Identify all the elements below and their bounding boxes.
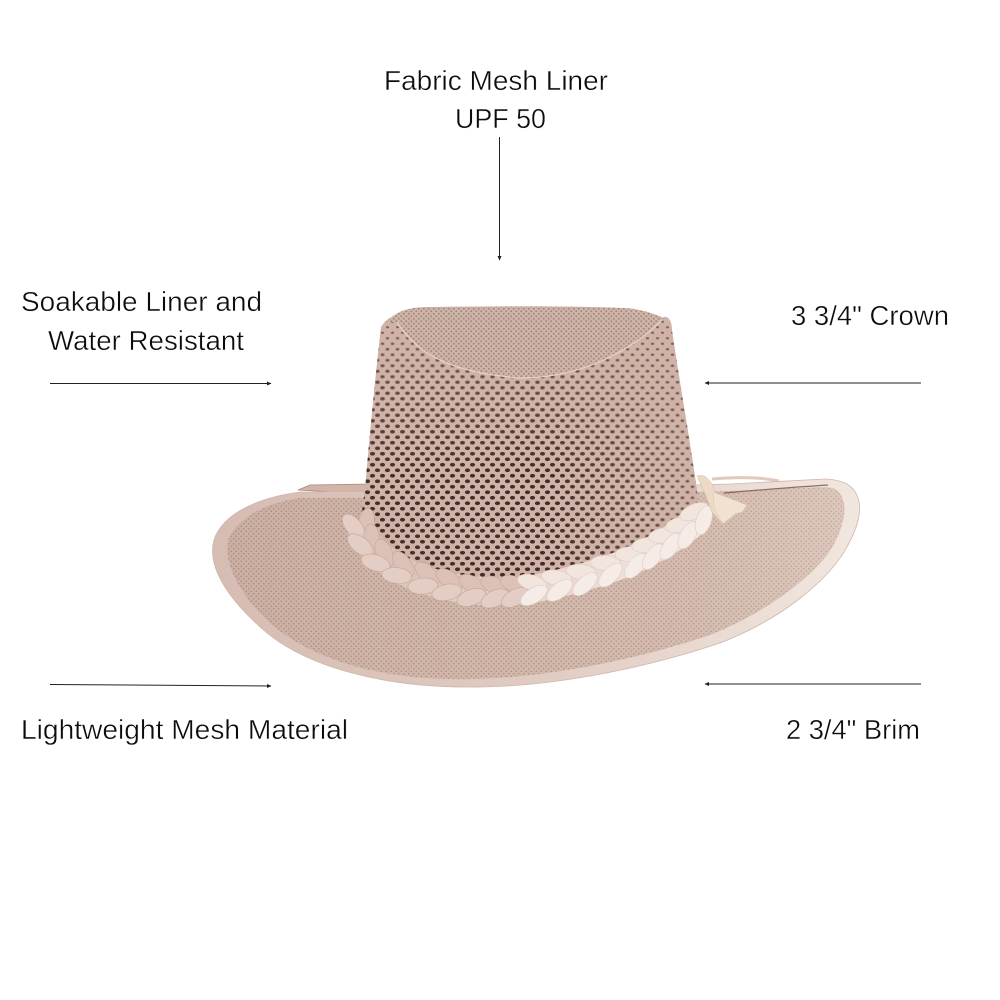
hat illustration — [213, 306, 860, 687]
brim mesh surface — [227, 487, 844, 679]
crown front mesh, base — [360, 316, 700, 591]
label: Soakable Liner and Water Resistant: Soakable Liner and — [21, 286, 262, 317]
tassel — [697, 475, 747, 524]
braided band — [336, 491, 725, 612]
brim back shadow — [724, 485, 828, 493]
brim — [213, 479, 860, 687]
label: 2 3/4" Brim: 2 3/4" Brim — [786, 714, 920, 745]
label: 3 3/4" Crown: 3 3/4" Crown — [791, 300, 949, 331]
arrow: to brim right — [705, 683, 921, 685]
arrow: to brim left — [50, 684, 271, 686]
dent shading — [397, 320, 662, 378]
brim edge binding — [213, 479, 860, 687]
crown top dent — [386, 306, 664, 378]
chin cord behind brim, left — [298, 484, 370, 494]
arrow: to crown right — [705, 382, 921, 384]
arrow: to crown top — [498, 137, 500, 260]
arrow: to crown left — [50, 382, 271, 384]
label: Soakable Liner and Water Resistant: Water Resistant — [48, 325, 244, 356]
brim light falloff — [227, 487, 844, 679]
label: Lightweight Mesh Material: Lightweight Mesh Material — [21, 714, 348, 745]
crown front mesh, dark holes — [362, 336, 698, 577]
crown — [360, 306, 700, 591]
label: Fabric Mesh Liner UPF 50 — [384, 65, 608, 134]
label: Fabric Mesh Liner UPF 50: Fabric Mesh Liner — [384, 65, 608, 96]
label: Fabric Mesh Liner UPF 50: UPF 50 — [455, 103, 546, 134]
chin cord behind brim, right — [712, 478, 779, 481]
braid segments — [336, 503, 384, 547]
label: Soakable Liner and Water Resistant — [21, 286, 262, 356]
band base — [360, 516, 700, 592]
